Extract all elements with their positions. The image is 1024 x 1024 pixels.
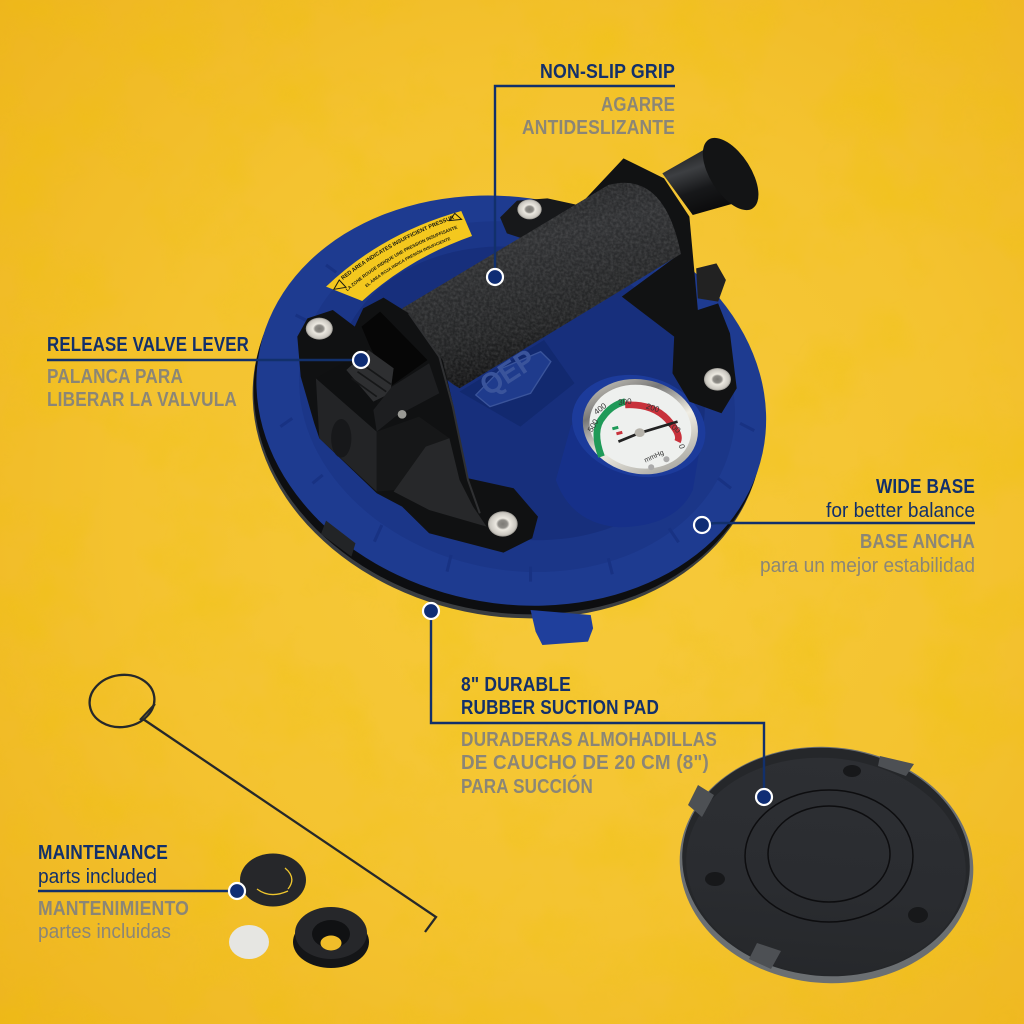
warning label: LA ZONE ROUGE INDIQUE UNE PRESSION INSUFFISANTE: [346, 226, 458, 292]
mounting screws: [306, 199, 731, 537]
accessory: wire tool: [86, 671, 436, 932]
gauge: mmHg: [643, 449, 665, 464]
gauge: 300: [618, 397, 633, 407]
heading: RUBBER SUCTION PAD: [461, 697, 659, 719]
accessory: black gasket disc: [240, 854, 306, 906]
spanish text: AGARRE: [601, 94, 675, 116]
spanish text: [522, 94, 675, 139]
product: vacuum suction cup: [252, 138, 766, 645]
gauge: 500: [586, 417, 601, 434]
callout: release valve lever: [47, 334, 369, 411]
heading: [461, 674, 659, 719]
QEP logo panel: QEP: [474, 343, 542, 402]
textured grip handle: [402, 183, 681, 388]
heading: NON-SLIP GRIP: [540, 61, 675, 83]
gauge: [556, 361, 717, 527]
suction pad underside: [213, 157, 803, 664]
spanish text: [38, 898, 189, 943]
heading: MAINTENANCE: [38, 842, 168, 864]
warning label: [326, 211, 472, 301]
heading: [38, 842, 168, 888]
spanish text: PALANCA PARA: [47, 366, 183, 388]
warning label: RED AREA INDICATES INSUFFICIENT PRESSURE: [340, 216, 454, 280]
spanish text: ANTIDESLIZANTE: [522, 117, 675, 139]
release tab: [531, 610, 593, 645]
accessory: black rubber grommet: [293, 907, 369, 968]
heading: RELEASE VALVE LEVER: [47, 334, 249, 356]
spanish text: LIBERAR LA VALVULA: [47, 389, 237, 411]
blue base disc: [217, 150, 805, 652]
warning label: EL ÁREA ROJA INDICA PRESIÓN INSUFICIENTE: [365, 237, 450, 288]
spanish text: partes incluidas: [38, 921, 171, 943]
side clip: [321, 521, 355, 557]
QEP logo panel: [460, 340, 574, 427]
spanish text: para un mejor estabilidad: [760, 555, 975, 577]
gauge: 0: [677, 443, 687, 450]
accessory: rubber suction pad: [670, 735, 983, 995]
heading: [826, 476, 975, 522]
gauge: 200: [645, 402, 661, 414]
rear bracket and foot: [500, 158, 737, 413]
front bracket and lever assembly: [297, 298, 538, 553]
callout: rubber suction pad: [423, 603, 772, 805]
handle knob: [662, 129, 770, 219]
callout: wide base: [694, 476, 975, 577]
spanish text: [47, 366, 237, 411]
spanish text: PARA SUCCIÓN: [461, 774, 593, 798]
gauge: 100: [666, 420, 683, 435]
gauge: 400: [592, 401, 609, 417]
spanish text: [760, 531, 975, 577]
spanish text: DE CAUCHO DE 20 CM (8"): [461, 752, 709, 774]
callout: non-slip grip: [487, 61, 675, 285]
heading: 8" DURABLE: [461, 674, 571, 696]
spanish text: BASE ANCHA: [860, 531, 975, 553]
heading: for better balance: [826, 500, 975, 522]
heading: parts included: [38, 866, 157, 888]
spanish text: [461, 729, 717, 798]
accessory: white felt disc: [229, 925, 269, 959]
spanish text: MANTENIMIENTO: [38, 898, 189, 920]
heading: WIDE BASE: [876, 476, 975, 498]
callout: maintenance parts: [38, 842, 245, 943]
spanish text: DURADERAS ALMOHADILLAS: [461, 729, 717, 751]
